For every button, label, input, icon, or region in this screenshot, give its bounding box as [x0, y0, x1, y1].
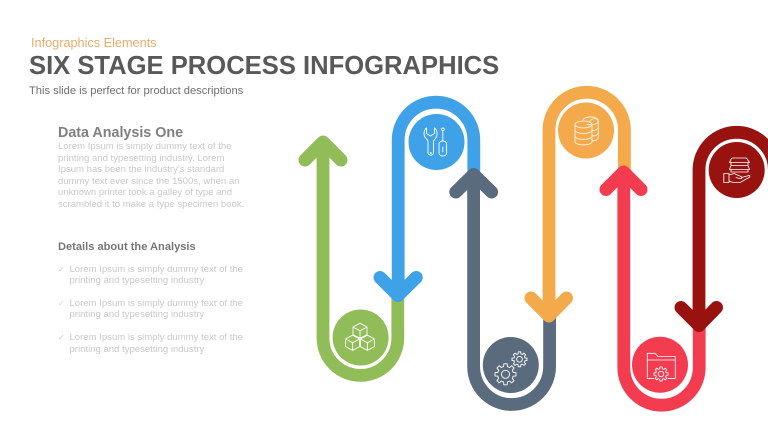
- eyebrow label: Infographics Elements: [31, 36, 157, 50]
- icon: cubes: [346, 323, 374, 350]
- list item 2: ✓: [58, 298, 65, 308]
- list item 1: [58, 264, 243, 286]
- list item 3: ✓: [58, 333, 65, 342]
- list item 1: printing and typesetting industry: [70, 275, 204, 286]
- icon: gears: [495, 352, 527, 385]
- text block: data analysis description: Ipsum has been the industry's standard: [58, 164, 224, 175]
- text block: data analysis description: scrambled it to make a type specimen book.: [58, 199, 244, 210]
- stage 4: orange arrow: [531, 92, 624, 316]
- text block: data analysis description: printing and typesetting industry. Lorem: [58, 153, 224, 164]
- stage 5: red arrow: [606, 172, 699, 405]
- stage 6: dark red arrow: [681, 132, 768, 326]
- list item 2: Lorem Ipsum is simply dummy text of the: [70, 298, 243, 308]
- text block: data analysis description: unknown printer took a galley of type and: [58, 187, 232, 198]
- heading: data analysis one: Data Analysis One: [58, 124, 183, 140]
- subtitle: This slide is perfect for product descriptions: [29, 84, 243, 96]
- list item 3: printing and typesetting industry: [70, 344, 204, 355]
- title: SIX STAGE PROCESS INFOGRAPHICS: [29, 52, 499, 80]
- list item 2: [58, 298, 243, 320]
- text block: data analysis description: dummy text ever since the 1500s, when an: [58, 176, 240, 187]
- icon: hand holding layers: [724, 158, 750, 182]
- text block: data analysis description: Lorem Ipsum is simply dummy text of the: [58, 141, 232, 152]
- icon: folder with gear: [647, 353, 675, 381]
- heading: details about the analysis: Details about the Analysis: [58, 240, 196, 252]
- list item 1: Lorem Ipsum is simply dummy text of the: [70, 264, 243, 274]
- list item 2: printing and typesetting industry: [70, 309, 204, 320]
- stage 2: blue arrow: [380, 102, 474, 296]
- stage 1: green arrow: [305, 142, 398, 375]
- list item 3: [58, 332, 243, 355]
- list item 1: ✓: [58, 264, 65, 274]
- list item 3: Lorem Ipsum is simply dummy text of the: [70, 332, 243, 343]
- stage 3: slate arrow: [456, 174, 550, 404]
- text block: data analysis description: [58, 141, 244, 210]
- icon: database: [575, 117, 598, 145]
- icon: wrench and screwdriver: [424, 128, 447, 156]
